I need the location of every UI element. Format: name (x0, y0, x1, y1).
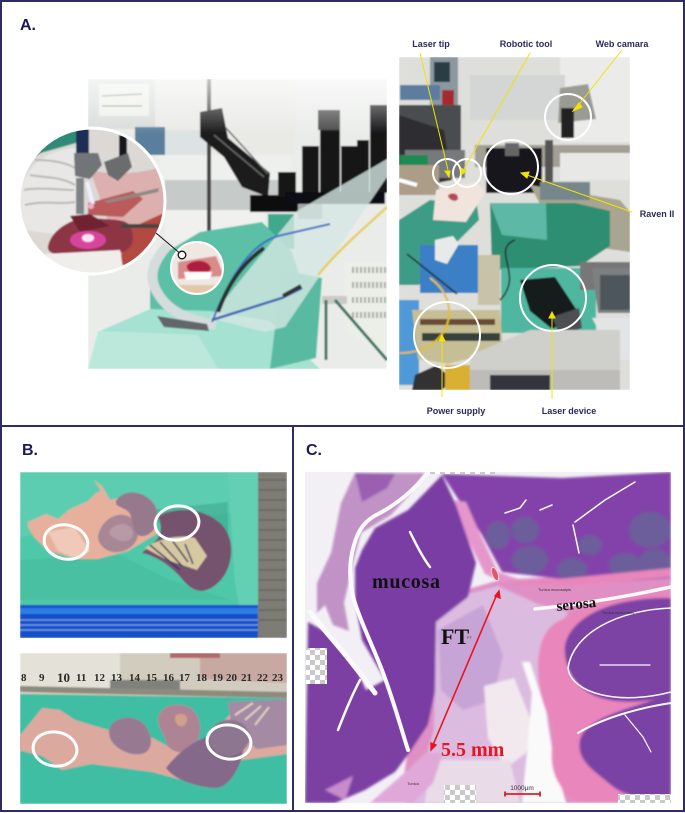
arrow: raven II (521, 172, 632, 212)
icon: small zoom circle on surgical field (170, 240, 224, 297)
ruler numbers: 18 (196, 672, 208, 684)
tissue: bottom white wedge (522, 662, 566, 803)
label: power supply: Power supply (427, 406, 485, 416)
label: mucosa: mucosa (372, 571, 440, 593)
label: laser device: Laser device (542, 406, 596, 416)
icon: white ellipse left (31, 729, 79, 769)
ruler numbers: 19 (212, 672, 224, 684)
icon: white ellipse right (153, 503, 201, 543)
ruler numbers: 23 (272, 672, 284, 684)
icon: magnified circle view (18, 127, 166, 280)
photo: robot setup with magnified view (18, 79, 387, 369)
tissue: lower bulb mucosa (579, 695, 671, 800)
panel C heading: C. (306, 442, 322, 459)
tissue: nodules (486, 512, 671, 582)
ruler numbers: 22 (257, 672, 268, 684)
ruler numbers: 16 (163, 672, 174, 684)
tissue: pink muscle right (537, 566, 671, 802)
tissue: top right mucosa (442, 472, 671, 583)
ruler numbers: 15 (146, 672, 158, 684)
label: FT: FT (441, 624, 469, 649)
ruler numbers: 12 (94, 672, 106, 684)
tissue: left mucosa (355, 475, 476, 752)
measurement label: 5.5 mm (441, 739, 505, 761)
ruler numbers: 17 (179, 672, 190, 684)
label: web camara: Web camara (596, 39, 649, 49)
ruler numbers: 14 (129, 672, 140, 684)
label: robotic tool: Robotic tool (500, 39, 552, 49)
scale bar (505, 785, 540, 796)
ruler numbers: 10 (57, 670, 70, 685)
tissue: pink stroma layer under centre (400, 570, 671, 803)
panel B heading: B. (22, 442, 38, 459)
checker patches (306, 648, 327, 684)
tissue: frayed fragment (317, 473, 425, 631)
label: serosa: serosa (556, 595, 597, 615)
scale bar: 1000µm (510, 785, 534, 792)
tissue: mucosal-submucosal pink stripe (452, 500, 518, 582)
tissue: upper bulb mucosa (565, 598, 671, 702)
arrow: laser device (549, 312, 555, 399)
icon: connector line and dot (156, 233, 186, 259)
icon: white ellipse right (205, 722, 253, 762)
ruler numbers (21, 670, 284, 685)
ruler numbers: 21 (241, 672, 252, 684)
label: tunica muscularis lower: Tunica (407, 781, 420, 786)
photo: specimen top (20, 472, 287, 638)
ruler numbers: 13 (111, 672, 122, 684)
arrow: robotic tool (461, 53, 530, 175)
ruler numbers: 11 (76, 672, 86, 684)
tissue: lower left mucosa (305, 622, 410, 803)
measurement arrow (431, 591, 500, 750)
histology image (305, 472, 671, 813)
label: laser tip: Laser tip (412, 39, 450, 49)
icon: white ellipse left (41, 521, 91, 563)
ruler numbers: 9 (39, 672, 45, 684)
arrow: laser tip (420, 53, 450, 177)
tissue: pale centre (395, 586, 568, 813)
callout circles on overview (414, 94, 591, 368)
arrow: power supply (439, 335, 445, 397)
label: raven II: Raven II (640, 209, 674, 219)
arrow: web camera (573, 50, 622, 111)
ruler numbers: 20 (226, 672, 238, 684)
label: tunica muscularis small: Tunica muscularis (602, 610, 634, 615)
white cracks (310, 472, 671, 752)
tissue: bottom left strip (370, 753, 443, 803)
photo: operating room overview (399, 57, 630, 390)
photo: specimen bottom (10, 653, 287, 804)
panel A heading: A. (20, 17, 36, 34)
label: tunica mucosa small: Tunica mucosalpis (538, 587, 571, 592)
label: small FT: FT (467, 635, 472, 640)
vessel (490, 566, 500, 582)
ruler numbers: 8 (21, 672, 27, 684)
